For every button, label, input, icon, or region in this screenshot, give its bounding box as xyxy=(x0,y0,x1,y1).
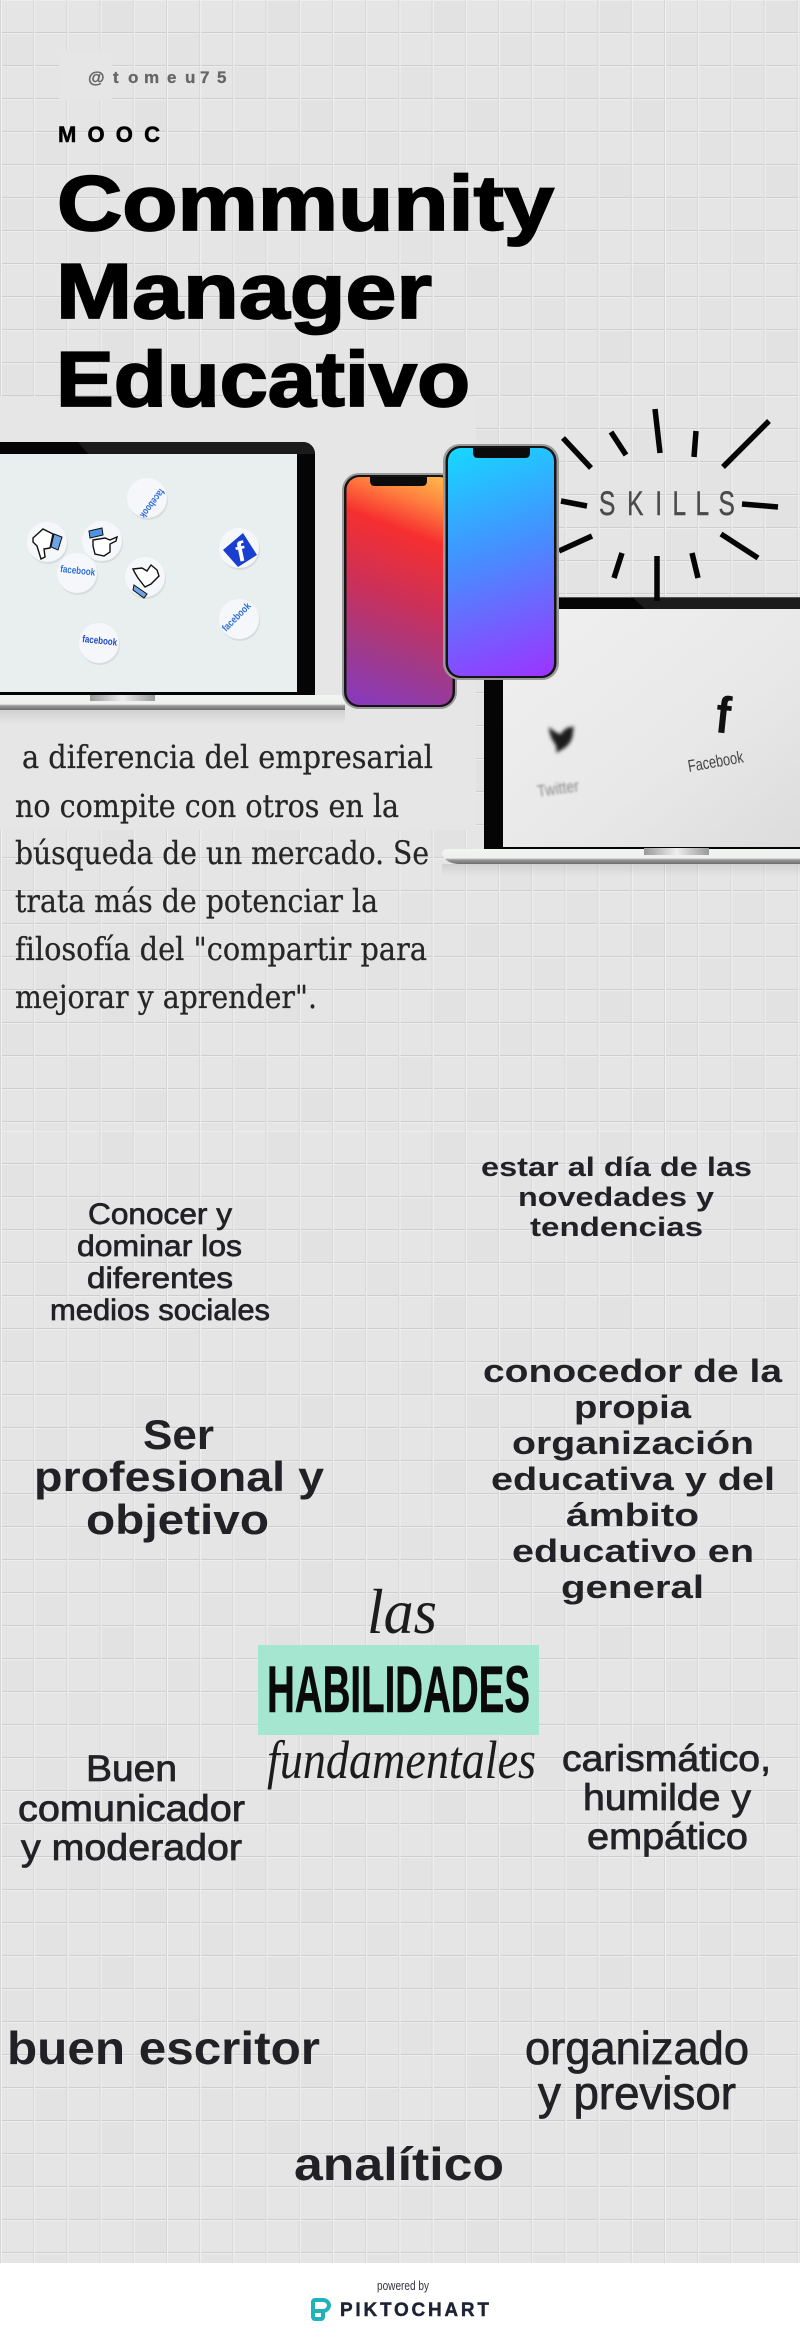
intro text xyxy=(15,738,433,1016)
pin: facebook bottom xyxy=(79,623,120,665)
skill: carismático xyxy=(562,1738,771,1857)
skill: buen comunicador xyxy=(18,1748,245,1868)
skill: conocedor de la organización: ámbito xyxy=(566,1497,699,1533)
icon: Piktochart logo xyxy=(313,2300,329,2319)
skill: estar al día: tendencias xyxy=(530,1212,703,1242)
intro text: trata más de potenciar la xyxy=(15,882,378,920)
kicker: MOOC: MOOC xyxy=(58,122,160,147)
skill: carismático: humilde y xyxy=(583,1777,752,1818)
skill: organizado y previsor: organizado xyxy=(525,2022,749,2074)
title: Educativo xyxy=(56,335,470,423)
intro text: búsqueda de un mercado. Se xyxy=(15,834,429,872)
title: Manager xyxy=(56,247,432,335)
phone: red gradient xyxy=(342,473,457,709)
banner: HABILIDADES xyxy=(258,1645,539,1735)
skill: conocer y dominar: dominar los xyxy=(77,1230,242,1263)
wordmark: PIKTOCHART: PIKTOCHART xyxy=(340,2300,489,2321)
pin: thumbs up right xyxy=(125,557,166,599)
laptop: Facebook pins xyxy=(0,442,345,724)
label: Facebook: Facebook xyxy=(686,747,745,776)
banner: HABILIDADES: HABILIDADES xyxy=(267,1652,530,1726)
skill: conocedor de la organización xyxy=(483,1353,782,1605)
skill: buen comunicador: Buen xyxy=(86,1748,177,1789)
script: las: las xyxy=(367,1576,437,1647)
skill: organizado y previsor xyxy=(525,2022,749,2119)
skill: conocer y dominar: diferentes xyxy=(87,1262,233,1295)
intro text: no compite con otros en la xyxy=(15,787,399,825)
script: fundamentales: fundamentales xyxy=(267,1730,536,1790)
skill: conocedor de la organización: propia xyxy=(574,1389,691,1425)
pin: facebook upside down: facebook xyxy=(137,486,166,520)
pin: thumbs down xyxy=(27,522,68,564)
pin: facebook bottom: facebook xyxy=(82,634,118,649)
skill: ser profesional xyxy=(34,1411,325,1543)
footer xyxy=(0,2263,800,2342)
label: Twitter: Twitter xyxy=(536,776,580,801)
skill: ser profesional: Ser xyxy=(143,1411,214,1458)
skill: estar al día xyxy=(481,1152,752,1242)
pin: Facebook logo: f xyxy=(233,535,249,568)
skill: conocedor de la organización: conocedor de la xyxy=(483,1353,782,1389)
skill: conocer y dominar xyxy=(50,1198,270,1327)
pin: facebook upside down xyxy=(127,478,168,520)
skill: estar al día: estar al día de las xyxy=(481,1152,752,1182)
skill: conocedor de la organización: general xyxy=(561,1569,704,1605)
skill: ser profesional: profesional y xyxy=(34,1453,325,1500)
pin: thumbs up left xyxy=(82,521,123,563)
skill: conocedor de la organización: educativo en xyxy=(512,1533,754,1569)
handle: @tomeu75: @tomeu75 xyxy=(88,68,226,87)
powered by: powered by xyxy=(377,2278,429,2293)
skill: conocer y dominar: medios sociales xyxy=(50,1294,270,1327)
title: Community xyxy=(57,159,554,247)
skill: conocedor de la organización: educativa y del xyxy=(491,1461,775,1497)
pin: facebook right: facebook xyxy=(220,601,254,634)
skill: conocedor de la organización: organización xyxy=(512,1425,754,1461)
skill: carismático: empático xyxy=(587,1816,748,1857)
SKILLS label: SKILLS xyxy=(599,485,735,523)
skill: organizado y previsor: y previsor xyxy=(538,2067,736,2119)
pin: facebook centre: facebook xyxy=(60,564,96,579)
pin: facebook centre xyxy=(57,553,98,595)
burst lines around SKILLS xyxy=(559,409,778,601)
skill: buen comunicador: comunicador xyxy=(18,1788,245,1829)
laptop: Twitter and Facebook screen xyxy=(442,597,800,876)
skill: buen comunicador: y moderador xyxy=(21,1827,242,1868)
skill: analítico: analítico xyxy=(294,2138,504,2190)
title xyxy=(56,159,554,423)
intro text: a diferencia del empresarial xyxy=(22,738,433,776)
skill: conocer y dominar: Conocer y xyxy=(88,1198,232,1231)
skill: estar al día: novedades y xyxy=(518,1182,714,1212)
phone: blue gradient xyxy=(443,444,559,680)
intro text: mejorar y aprender". xyxy=(15,978,317,1016)
skill: carismático: carismático, xyxy=(562,1738,771,1779)
icon: Facebook f: f xyxy=(713,686,734,746)
icon: blurred bird xyxy=(549,727,574,753)
skill: ser profesional: objetivo xyxy=(86,1496,269,1543)
skill: buen escritor: buen escritor xyxy=(7,2022,320,2074)
intro text: filosofía del "compartir para xyxy=(15,930,427,968)
pin: Facebook logo xyxy=(219,528,260,570)
